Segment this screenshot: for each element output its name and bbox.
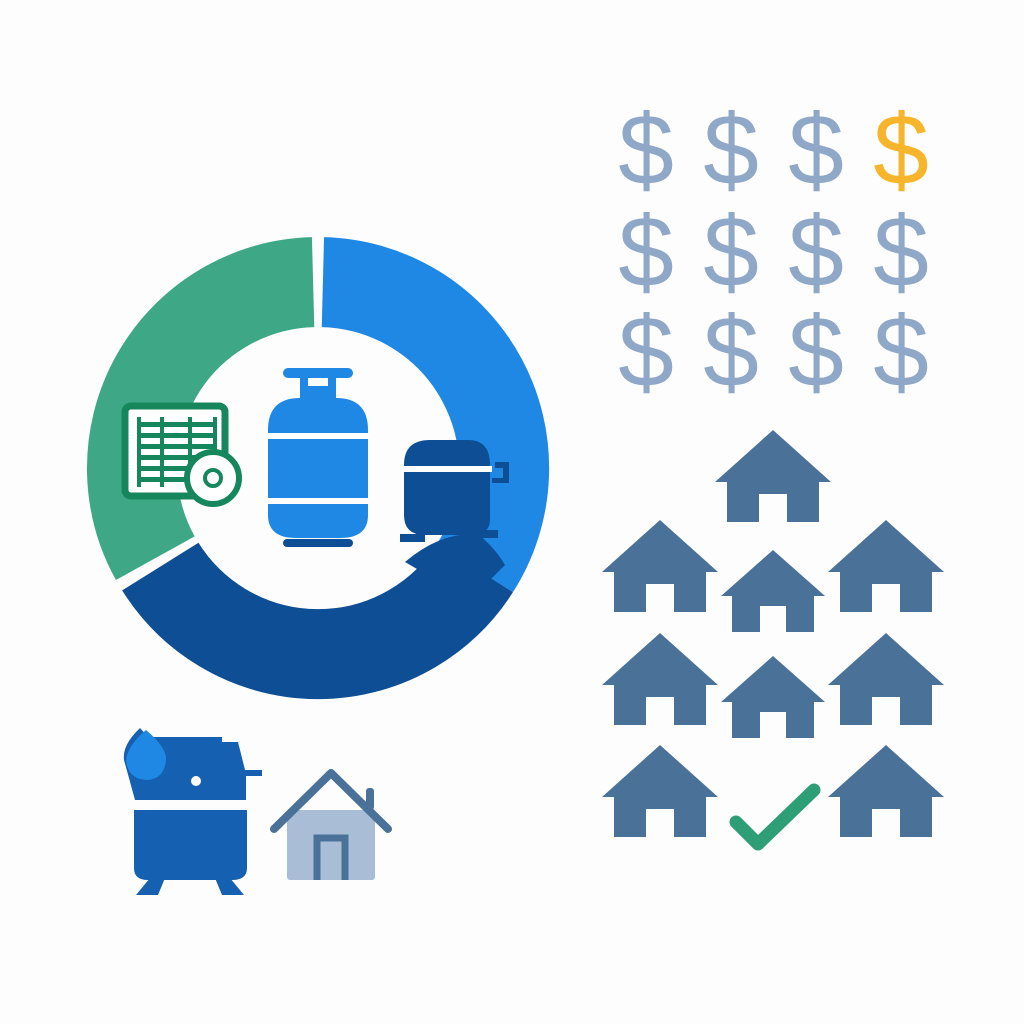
donut chart bbox=[132, 282, 505, 654]
house grid bbox=[602, 430, 944, 844]
dollar grid: $ bbox=[788, 296, 844, 408]
dollar grid: $ bbox=[873, 94, 929, 206]
dollar grid: $ bbox=[703, 94, 759, 206]
dollar grid: $ bbox=[873, 296, 929, 408]
dollar grid: $ bbox=[873, 196, 929, 308]
dollar grid: $ bbox=[788, 196, 844, 308]
icon: gas cylinder bbox=[266, 368, 370, 547]
icon: check mark bbox=[736, 790, 814, 844]
dollar grid: $ bbox=[618, 296, 674, 408]
dollar grid: $ bbox=[618, 196, 674, 308]
icon: heat exchanger grid bbox=[125, 406, 239, 504]
dollar grid bbox=[618, 94, 929, 408]
icon: water heater tank bbox=[124, 728, 262, 895]
icon: small house bbox=[274, 773, 388, 880]
dollar grid: $ bbox=[618, 94, 674, 206]
dollar grid: $ bbox=[788, 94, 844, 206]
icon: compressor bbox=[400, 440, 509, 542]
dollar grid: $ bbox=[703, 196, 759, 308]
dollar grid: $ bbox=[703, 296, 759, 408]
